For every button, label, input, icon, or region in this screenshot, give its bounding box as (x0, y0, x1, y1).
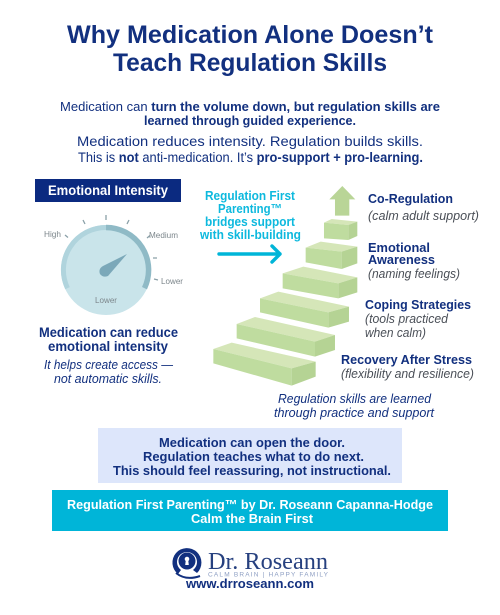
step 4 (283, 267, 357, 298)
banner: regulation first parenting: Calm the Brain First (191, 511, 314, 526)
title: Why Medication Alone Doesn’t (67, 21, 434, 49)
caption: access: It helps create access — (44, 358, 173, 372)
gauge dial (44, 215, 183, 315)
intro text: volume: learned through guided experience. (144, 113, 356, 128)
panel: emotional intensity (35, 179, 183, 386)
callout: regulation first parenting: Regulation First (205, 188, 296, 203)
label: emotional awareness: Awareness (368, 252, 435, 267)
heading: emotional intensity (35, 179, 181, 202)
label: recovery after stress: (flexibility and resilience) (341, 367, 474, 381)
callout: regulation first parenting: bridges support (205, 214, 296, 229)
intro text: pro-support (77, 134, 423, 165)
intro text: pro-support: This is not anti-medication. It’s pro-support + pro-learning. (78, 150, 423, 165)
label: coping strategies (365, 297, 471, 340)
label: coping strategies: Coping Strategies (365, 297, 471, 312)
step 5 (306, 242, 357, 269)
callout: open the door (98, 428, 402, 483)
staircase (213, 186, 357, 386)
step 2 (237, 317, 335, 357)
label: recovery after stress: Recovery After Stress (341, 352, 472, 367)
logo: Dr. Roseann: CALM BRAIN | HAPPY FAMILY (208, 572, 329, 578)
logo: Dr. Roseann (172, 548, 329, 591)
intro text: volume (60, 99, 440, 128)
label: emotional awareness (368, 240, 460, 281)
icon: head with keyhole (172, 548, 201, 578)
callout: regulation first parenting (199, 188, 301, 242)
step 3 (260, 292, 349, 328)
label: emotional awareness: (naming feelings) (368, 267, 460, 281)
title: Teach Regulation Skills (113, 49, 387, 77)
label: co-regulation: (calm adult support) (368, 209, 479, 223)
step 1 (213, 343, 316, 386)
label: coping strategies: (tools practiced (365, 312, 449, 326)
gauge dial: High (44, 229, 61, 239)
callout: regulation first parenting: with skill-building (199, 227, 301, 242)
callout: open the door: This should feel reassuring, not instructional. (113, 463, 391, 478)
logo: Dr. Roseann: www.drroseann.com (185, 577, 314, 591)
caption: stairs: through practice and support (274, 406, 435, 420)
caption: access (44, 358, 173, 386)
label: co-regulation: Co-Regulation (368, 191, 453, 206)
gauge dial: Medium (149, 230, 178, 240)
callout: regulation first parenting: Parenting™ (218, 201, 282, 216)
caption: medication can reduce (39, 325, 178, 354)
banner: regulation first parenting: Regulation First Parenting™ by Dr. Roseann Capanna-Hodge (67, 497, 433, 512)
caption: stairs (274, 392, 435, 420)
arrow: to stairs (219, 246, 280, 262)
heading: emotional intensity: Emotional Intensity (48, 183, 168, 198)
banner: regulation first parenting (52, 490, 448, 531)
arrow: upward (329, 186, 355, 216)
gauge dial: Lower (161, 276, 183, 286)
callout: open the door: Regulation teaches what to do next. (143, 449, 364, 464)
caption: stairs: Regulation skills are learned (278, 392, 432, 406)
step 6 (324, 219, 357, 240)
caption: medication can reduce: emotional intensity (48, 339, 168, 354)
label: recovery after stress (341, 352, 474, 381)
intro text: volume: Medication can turn the volume down, but regulation skills are (60, 99, 440, 114)
label: emotional awareness: Emotional (368, 240, 430, 255)
title (67, 21, 434, 77)
label: coping strategies: when calm) (365, 326, 426, 340)
caption: medication can reduce: Medication can reduce (39, 325, 178, 340)
callout: open the door: Medication can open the door. (159, 435, 345, 450)
gauge dial: Lower (95, 295, 117, 305)
intro text: pro-support: Medication reduces intensity. Regulation builds skills. (77, 134, 423, 149)
label: co-regulation (368, 191, 479, 223)
caption: access: not automatic skills. (54, 372, 162, 386)
logo: Dr. Roseann: Dr. Roseann (208, 549, 328, 575)
